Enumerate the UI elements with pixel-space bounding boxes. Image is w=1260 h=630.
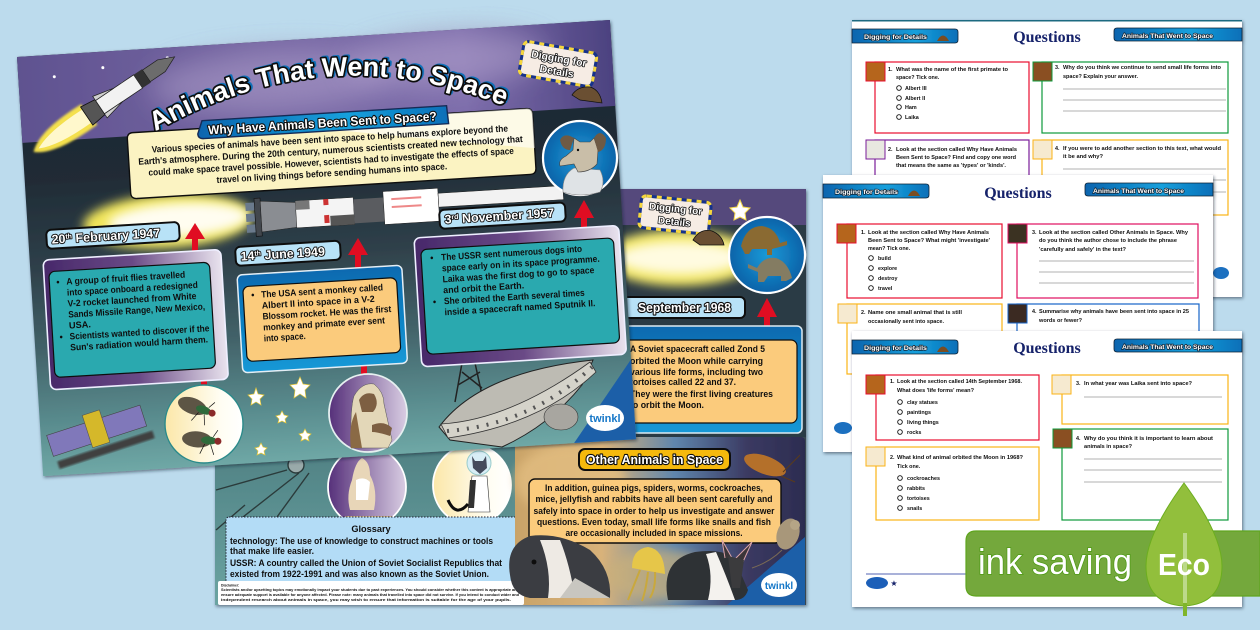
leaf icon bbox=[1146, 483, 1222, 616]
question 3: 3. bbox=[1076, 381, 1081, 387]
question 3: 'carefully and safely' in the text? bbox=[1039, 247, 1126, 253]
question 1: What was the name of the first primate to bbox=[896, 67, 1009, 73]
question 2: tortoises bbox=[907, 496, 930, 502]
worksheet C bbox=[852, 331, 1242, 607]
question 2: that means the same as 'types' or 'kinds'. bbox=[896, 163, 1007, 169]
question 2: 2. bbox=[890, 455, 895, 461]
question 1: mean? Tick one. bbox=[868, 246, 911, 252]
badge: digging for details: Details bbox=[539, 63, 575, 81]
question 1: Look at the section called Why Have Animals bbox=[868, 230, 989, 236]
text: fruit flies bullets: Scientists wanted to discover if the bbox=[69, 323, 210, 342]
icon: cat circle bbox=[433, 445, 511, 525]
text: fruit flies bullets: • bbox=[59, 332, 63, 342]
question 1: travel bbox=[878, 286, 893, 292]
question 2: Tick one. bbox=[897, 464, 921, 470]
text: Laika bullets: • bbox=[433, 297, 436, 307]
question 1: build bbox=[878, 256, 891, 262]
question 1 bbox=[837, 224, 1002, 298]
panel: glossary: USSR: A country called the Union of Soviet Socialist Republics that bbox=[230, 558, 502, 568]
date label: 14th June 1949 bbox=[235, 241, 341, 266]
logo: twinkl: twinkl bbox=[589, 413, 621, 425]
text: Zond 5 account: various life forms, including two bbox=[630, 367, 763, 377]
text: fruit flies bullets: V-2 rocket launched from White bbox=[67, 291, 197, 309]
question 1: clay statues bbox=[907, 400, 938, 406]
text: Laika bullets: Laika was the first dog to go to space bbox=[442, 265, 595, 284]
question 1: explore bbox=[878, 266, 897, 272]
question 3: In what year was Laika sent into space? bbox=[1084, 381, 1192, 387]
icon: monkey circle bbox=[329, 374, 407, 452]
icon: cockroach bbox=[741, 449, 800, 482]
panel: poster background bbox=[17, 20, 636, 476]
text: Albert II bullets: Blossom rocket. He was the first bbox=[262, 304, 392, 322]
header band: digging for details bbox=[852, 29, 958, 43]
question 4: If you were to add another section to this text, what would bbox=[1063, 146, 1221, 152]
question 4 bbox=[1033, 140, 1228, 215]
question 2: What kind of animal orbited the Moon in 1968? bbox=[897, 455, 1023, 461]
text block: intro paragraph bbox=[137, 123, 524, 190]
text: fruit flies bullets: USA. bbox=[69, 319, 91, 331]
question 3: 3. bbox=[1055, 65, 1060, 71]
text block: intro paragraph: travel on living things before sending humans into space. bbox=[216, 161, 447, 185]
heading: questions: Questions bbox=[984, 185, 1052, 202]
question 4: Summarise why animals have been sent into space in 25 bbox=[1039, 309, 1189, 315]
text: Laika bullets: inside a spacecraft named Sputnik II. bbox=[444, 298, 596, 317]
text: fruit flies bullets: • bbox=[56, 277, 60, 287]
header band: digging for details: Digging for Details bbox=[864, 345, 927, 352]
panel: 14th September 1968 bbox=[612, 326, 802, 433]
question 2 bbox=[838, 304, 1002, 374]
text box: why animals sent to space bbox=[127, 108, 536, 199]
date label: 20th February 1947: th bbox=[65, 233, 72, 241]
icon: mouse bbox=[752, 515, 804, 568]
icon: jellyfish bbox=[628, 547, 665, 601]
date label: 14th September 1968 bbox=[618, 297, 745, 318]
date label: 20th February 1947: February 1947 bbox=[72, 226, 161, 245]
text: Albert II bullets: into space. bbox=[264, 331, 306, 344]
question 1: Laika bbox=[905, 115, 920, 121]
text block: intro paragraph: Earth's atmosphere. During the 20th century, numerous scientists created new technology that bbox=[138, 134, 523, 167]
panel: glossary: existed from 1922-1991 and was also known as the Soviet Union. bbox=[230, 569, 489, 579]
banner text: ink saving bbox=[978, 541, 1132, 582]
disclaimer: Scientists and/or upsetting topics may emotionally impact your students due to past experiences. You should consider whether this content is appropriate and bbox=[221, 588, 519, 592]
question 1: Albert II bbox=[905, 96, 926, 102]
corner triangle bbox=[569, 359, 636, 443]
text: Laika bullets: The USSR sent numerous dogs into bbox=[441, 244, 583, 262]
text: Laika bullets: • bbox=[430, 253, 434, 263]
date label: 14th June 1949: 14 bbox=[240, 249, 255, 264]
question 2: Been Sent to Space? Find and copy one word bbox=[896, 155, 1016, 161]
logo: twinkl bbox=[586, 405, 624, 431]
text: Zond 5 account bbox=[630, 344, 773, 410]
question 4: words or fewer? bbox=[1038, 318, 1082, 324]
text: Albert II bullets bbox=[251, 282, 393, 344]
panel: glossary bbox=[226, 517, 518, 583]
icon: satellite bbox=[44, 396, 155, 470]
header band: animals that went to space bbox=[1085, 183, 1213, 196]
heading: questions: Questions bbox=[1013, 340, 1081, 357]
icon: fruit flies circle bbox=[165, 385, 243, 463]
icon: sputnik bbox=[216, 457, 309, 530]
text: Zond 5 account: to orbit the Moon. bbox=[630, 400, 704, 410]
badge: digging for details bbox=[639, 195, 711, 235]
panel: glossary: technology: The use of knowledge to construct machines or tools bbox=[230, 536, 493, 546]
question 3: Look at the section called Other Animals in Space. Why bbox=[1039, 230, 1188, 236]
question 3 bbox=[1033, 62, 1228, 133]
question 1: 1. bbox=[888, 67, 893, 73]
footer: rule, logo and star bbox=[866, 574, 970, 589]
logo: twinkl bbox=[761, 573, 797, 597]
question 1 bbox=[866, 62, 1029, 133]
question 2 bbox=[866, 140, 1029, 210]
question 4 bbox=[1008, 304, 1199, 374]
question 4: it be and why? bbox=[1063, 154, 1103, 160]
logo: twinkl small bbox=[834, 422, 852, 434]
text block: intro paragraph: Various species of animals have been sent into space to help humans explore beyond the bbox=[151, 123, 508, 155]
disclaimer: independent research about animals in space, you may wish to ensure that information is suitable for the age of your pupils. bbox=[221, 598, 511, 602]
header band: digging for details: Digging for Details bbox=[835, 189, 898, 196]
question 3: do you think the author chose to include the phrase bbox=[1039, 238, 1177, 244]
question 1: 1. bbox=[890, 379, 895, 385]
question 2: 2. bbox=[888, 147, 893, 153]
heading: other animals in space bbox=[579, 449, 730, 470]
question 1: living things bbox=[907, 420, 939, 426]
icon: laika portrait bbox=[543, 121, 617, 195]
text box: other animals: In addition, guinea pigs, spiders, worms, cockroaches, bbox=[545, 483, 763, 493]
header band: animals that went to space: Animals That Went to Space bbox=[1122, 344, 1213, 351]
question 1: 1. bbox=[861, 230, 866, 236]
question 1: Been Sent to Space? What might 'investigate' bbox=[868, 238, 990, 244]
badge: digging for details: Digging for bbox=[648, 201, 703, 218]
header band: animals that went to space: Animals That Went to Space bbox=[1122, 33, 1213, 40]
icon: radio dish bbox=[439, 360, 596, 447]
text: Laika bullets: and orbit the Earth. bbox=[443, 280, 524, 295]
disclaimer: ensure adequate support is available for anyone affected. Please note: many animals that travelled into space did not survive. If you intend to conduct wider and bbox=[221, 593, 519, 597]
date label: 20th February 1947: 20 bbox=[51, 232, 66, 247]
date label: 20th February 1947 bbox=[46, 222, 180, 249]
icon: star bbox=[730, 200, 750, 220]
question 1: Albert III bbox=[905, 86, 927, 92]
stars bbox=[248, 377, 311, 455]
text: fruit flies bullets: Sands Missile Range, New Mexico, bbox=[68, 301, 205, 320]
icon: guinea pig circle bbox=[328, 447, 406, 527]
icon: rabbit bbox=[667, 540, 752, 600]
question 2: Name one small animal that is still bbox=[868, 310, 963, 316]
question 2: rabbits bbox=[907, 486, 925, 492]
question 4: 4. bbox=[1032, 309, 1037, 315]
disclaimer: Disclaimer: bbox=[221, 584, 239, 588]
heading: other animals in space: Other Animals in Space bbox=[586, 453, 723, 467]
question 2: cockroaches bbox=[907, 476, 940, 482]
header band: digging for details: Digging for Details bbox=[864, 34, 927, 41]
text: fruit flies bullets: into space onboard a redesigned bbox=[67, 280, 198, 298]
worksheet B bbox=[823, 175, 1213, 452]
header band: animals that went to space bbox=[1114, 339, 1242, 352]
header band: animals that went to space: Animals That Went to Space bbox=[1093, 188, 1184, 195]
footer: rule, logo and star: ★ bbox=[890, 579, 898, 588]
text box: other animals: safely into space in order to help us investigate and answer bbox=[534, 506, 775, 516]
icon: tortoises circle bbox=[729, 217, 805, 293]
text: Laika bullets: space early on in its space programme. bbox=[442, 254, 600, 273]
logo: twinkl small bbox=[1213, 267, 1229, 279]
date label: 3rd November 1957 bbox=[439, 202, 566, 229]
panel: top space band bbox=[600, 189, 806, 437]
eco badge: ink saving bbox=[966, 483, 1260, 616]
question 1: What does 'life forms' mean? bbox=[897, 388, 974, 394]
question 1: Ham bbox=[905, 105, 917, 111]
question 1: rocks bbox=[907, 430, 921, 436]
disclaimer bbox=[218, 581, 524, 605]
text box: other animals: questions. Even today, small life forms like snails and fish bbox=[537, 517, 771, 527]
poster page 1 (front) bbox=[16, 18, 639, 480]
panel: 1957 Laika bbox=[414, 225, 626, 367]
question 1: space? Tick one. bbox=[896, 75, 940, 81]
question 1: paintings bbox=[907, 410, 931, 416]
question 3 bbox=[1008, 224, 1198, 298]
question 1: destroy bbox=[878, 276, 897, 282]
panel: other animals in space bbox=[218, 437, 805, 605]
question 2: Look at the section called Why Have Animals bbox=[896, 147, 1017, 153]
question 2: snails bbox=[907, 506, 922, 512]
arrow: tortoises to panel bbox=[757, 298, 777, 327]
badge: digging for details: Digging for bbox=[530, 48, 587, 70]
panel: 1947 fruit flies bbox=[43, 249, 228, 390]
question 4: 4. bbox=[1055, 146, 1060, 152]
text: Albert II bullets: Albert II into space in a V-2 bbox=[262, 294, 375, 311]
question 2 bbox=[866, 447, 1039, 520]
text box: other animals: are occasionally included in space missions. bbox=[566, 528, 742, 538]
question 4 bbox=[1053, 429, 1228, 520]
heading band: why have animals been sent to space: Why Have Animals Been Sent to Space? bbox=[208, 109, 437, 137]
date label: 3rd November 1957: 3 bbox=[444, 212, 452, 227]
text: Zond 5 account: They were the first living creatures bbox=[630, 389, 773, 399]
leaf icon: Eco bbox=[1158, 547, 1210, 582]
question 3: space? Explain your answer. bbox=[1063, 74, 1139, 80]
question 3 bbox=[1052, 375, 1228, 424]
panel: 1949 Albert II bbox=[237, 265, 408, 373]
header band: digging for details bbox=[823, 184, 929, 198]
text: Laika bullets bbox=[430, 243, 603, 318]
header band: digging for details bbox=[852, 340, 958, 354]
question 4: animals in space? bbox=[1084, 444, 1132, 450]
badge: digging for details: Details bbox=[657, 215, 692, 230]
question 1 bbox=[866, 375, 1039, 440]
panel: lower left teal with glossary bbox=[215, 437, 518, 605]
icon: guinea pig bbox=[509, 535, 610, 598]
logo: twinkl: twinkl bbox=[765, 581, 793, 592]
text: fruit flies bullets: A group of fruit flies travelled bbox=[66, 270, 185, 287]
question 3: Why do you think we continue to send small life forms into bbox=[1063, 65, 1222, 71]
green banner bbox=[966, 531, 1260, 596]
date label: 14th June 1949: th bbox=[254, 250, 261, 258]
text: fruit flies bullets bbox=[56, 268, 210, 353]
text box: other animals bbox=[529, 479, 781, 543]
question 4: Why do you think it is important to learn about bbox=[1084, 436, 1213, 442]
text: Albert II bullets: monkey and primate ever sent bbox=[263, 315, 385, 333]
heading: questions: Questions bbox=[1013, 29, 1081, 46]
arrow: laika up to 1957 bbox=[574, 200, 594, 240]
text box: other animals: mice, jellyfish and rabbits have all been sent carefully and bbox=[536, 494, 772, 504]
question 3: 3. bbox=[1032, 230, 1037, 236]
text: Albert II bullets: The USA sent a monkey called bbox=[261, 282, 383, 300]
date label: 3rd November 1957: November 1957 bbox=[458, 206, 555, 226]
worksheet A bbox=[852, 20, 1242, 297]
text: Zond 5 account: A Soviet spacecraft called Zond 5 bbox=[630, 344, 765, 354]
text: Zond 5 account: orbited the Moon while carrying bbox=[630, 356, 763, 366]
poster page 2 (behind) bbox=[215, 189, 806, 605]
date label: 14th June 1949: June 1949 bbox=[261, 245, 325, 262]
badge: digging for details bbox=[519, 41, 602, 103]
question 2: occasionally sent into space. bbox=[868, 319, 944, 325]
text: Laika bullets: She orbited the Earth several times bbox=[444, 288, 585, 306]
question 1: Look at the section called 14th September 1968. bbox=[897, 379, 1022, 385]
text: fruit flies bullets: Sun's radiation would harm them. bbox=[70, 334, 208, 353]
icon: horizontal rocket with exhaust glow bbox=[82, 180, 565, 253]
date label: 3rd November 1957: rd bbox=[451, 214, 459, 221]
icon: rocket flying upward bbox=[26, 46, 182, 163]
header band: animals that went to space bbox=[1114, 28, 1242, 41]
date label: 14th September 1968: September 1968 bbox=[638, 301, 731, 315]
panel: glossary: that make life easier. bbox=[230, 546, 314, 556]
title: arched heading: Animals That Went to Space bbox=[151, 54, 510, 131]
icon: dirt pile bbox=[693, 230, 724, 245]
corner triangle bbox=[727, 537, 805, 605]
arrow: monkey up to 1949 bbox=[348, 238, 368, 374]
text: Zond 5 account: tortoises called 22 and 37. bbox=[630, 377, 736, 387]
text: Albert II bullets: • bbox=[251, 290, 255, 300]
question 2: 2. bbox=[861, 310, 866, 316]
arrow: flies up to 1947 bbox=[185, 223, 207, 389]
question 4: 4. bbox=[1076, 436, 1081, 442]
panel: glossary: Glossary bbox=[351, 524, 392, 534]
text block: intro paragraph: could make space travel possible. However, scientists had to investigate the effects of space bbox=[148, 146, 514, 178]
